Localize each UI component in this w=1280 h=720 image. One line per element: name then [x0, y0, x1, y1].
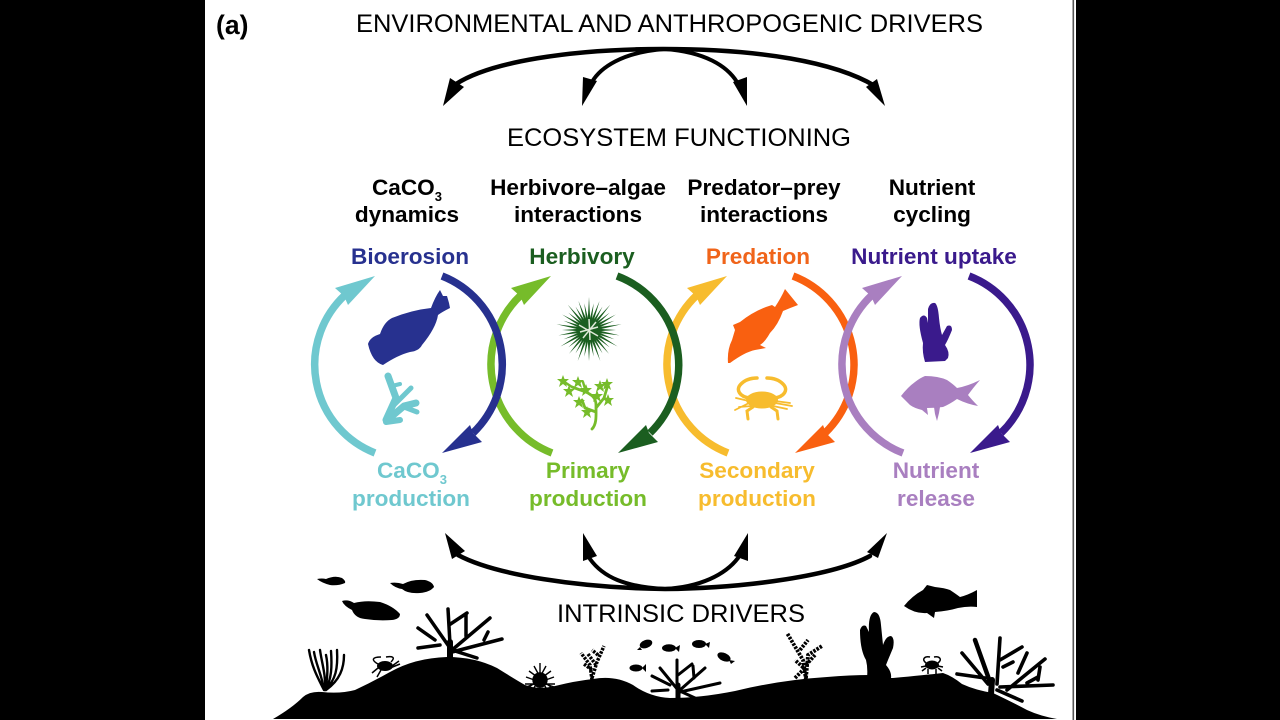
heading: intrinsic drivers: INTRINSIC DRIVERS — [557, 600, 805, 628]
column heading: CaCO3 dynamics — [355, 175, 459, 227]
seaweed right — [787, 633, 822, 680]
cycle arrow: nutrient uptake (dark purple) — [969, 276, 1030, 453]
icon: lilac fish — [901, 376, 980, 421]
column heading: nutrient cycling: cycling — [893, 202, 971, 227]
cycle arrow: CaCO3 production (cyan) — [315, 276, 375, 453]
branching coral right — [957, 638, 1053, 701]
column heading: herbivore-algae interactions — [490, 175, 666, 227]
branching coral centre — [652, 660, 720, 698]
panel label (a): (a) — [216, 10, 248, 40]
label: CaCO3 production: 3 — [440, 472, 447, 487]
icon: green seaweed — [557, 375, 614, 429]
column heading: CaCO3 dynamics: 3 — [435, 189, 442, 204]
column heading: herbivore-algae interactions: Herbivore–algae — [490, 175, 666, 200]
label: bioerosion: Bioerosion — [351, 244, 469, 269]
label: secondary production: Secondary — [699, 458, 815, 483]
small crab right — [921, 657, 943, 674]
label: herbivory: Herbivory — [529, 244, 635, 269]
reef ground — [273, 657, 1057, 719]
label: CaCO3 production: CaCO — [377, 458, 440, 483]
icon: orange predator fish — [728, 289, 798, 363]
label: nutrient release — [893, 458, 980, 511]
column heading: nutrient cycling — [889, 175, 976, 227]
label: primary production: Primary — [546, 458, 631, 483]
icon: parrotfish — [368, 290, 450, 365]
column heading: CaCO3 dynamics: CaCO — [372, 175, 435, 200]
arrows: top drivers — [443, 49, 885, 106]
branching coral left — [418, 609, 502, 658]
label: primary production — [529, 458, 647, 511]
arrows: bottom intrinsic drivers — [445, 533, 887, 589]
tall sponge coral — [860, 612, 894, 678]
cycle arrow: herbivory (dark green) — [617, 276, 679, 453]
column heading: predator-prey interactions — [687, 175, 841, 227]
cycle arrow: secondary production (yellow) — [667, 276, 728, 453]
label: CaCO3 production: production — [352, 486, 470, 511]
label: secondary production: production — [698, 486, 816, 511]
large fish — [904, 585, 977, 618]
icon: yellow crab — [735, 378, 792, 419]
school fish — [317, 577, 434, 620]
column heading: herbivore-algae interactions: interactions — [514, 202, 642, 227]
column heading: CaCO3 dynamics: dynamics — [355, 202, 459, 227]
cycle arrow: nutrient release (lilac) — [842, 276, 903, 453]
icon: purple coral — [919, 303, 952, 362]
tiny fish — [630, 638, 735, 672]
column heading: predator-prey interactions: interactions — [700, 202, 828, 227]
icon: sea urchin — [556, 297, 622, 362]
gorgonian — [309, 650, 344, 690]
small seaweed left — [581, 646, 604, 680]
column heading: predator-prey interactions: Predator–prey — [687, 175, 841, 200]
icon: cyan coral — [386, 376, 417, 422]
label: predation: Predation — [706, 244, 810, 269]
cycle arrow: predation (orange) — [793, 276, 854, 453]
cycle arrow: primary production (light green) — [491, 276, 552, 453]
small urchin — [525, 663, 555, 688]
label: nutrient release: Nutrient — [893, 458, 980, 483]
label: secondary production — [698, 458, 816, 511]
label: nutrient release: release — [897, 486, 975, 511]
label: CaCO3 production — [352, 458, 470, 511]
reef scene silhouette — [273, 577, 1057, 719]
small crab left — [372, 657, 400, 677]
title: environmental and anthropogenic drivers: ENVIRONMENTAL AND ANTHROPOGENIC DRIVERS — [356, 10, 983, 38]
label: nutrient uptake: Nutrient uptake — [851, 244, 1017, 269]
heading: ecosystem functioning: ECOSYSTEM FUNCTIONING — [507, 124, 851, 152]
label: primary production: production — [529, 486, 647, 511]
cycle arrow: bioerosion (blue) — [442, 276, 502, 453]
column heading: nutrient cycling: Nutrient — [889, 175, 976, 200]
